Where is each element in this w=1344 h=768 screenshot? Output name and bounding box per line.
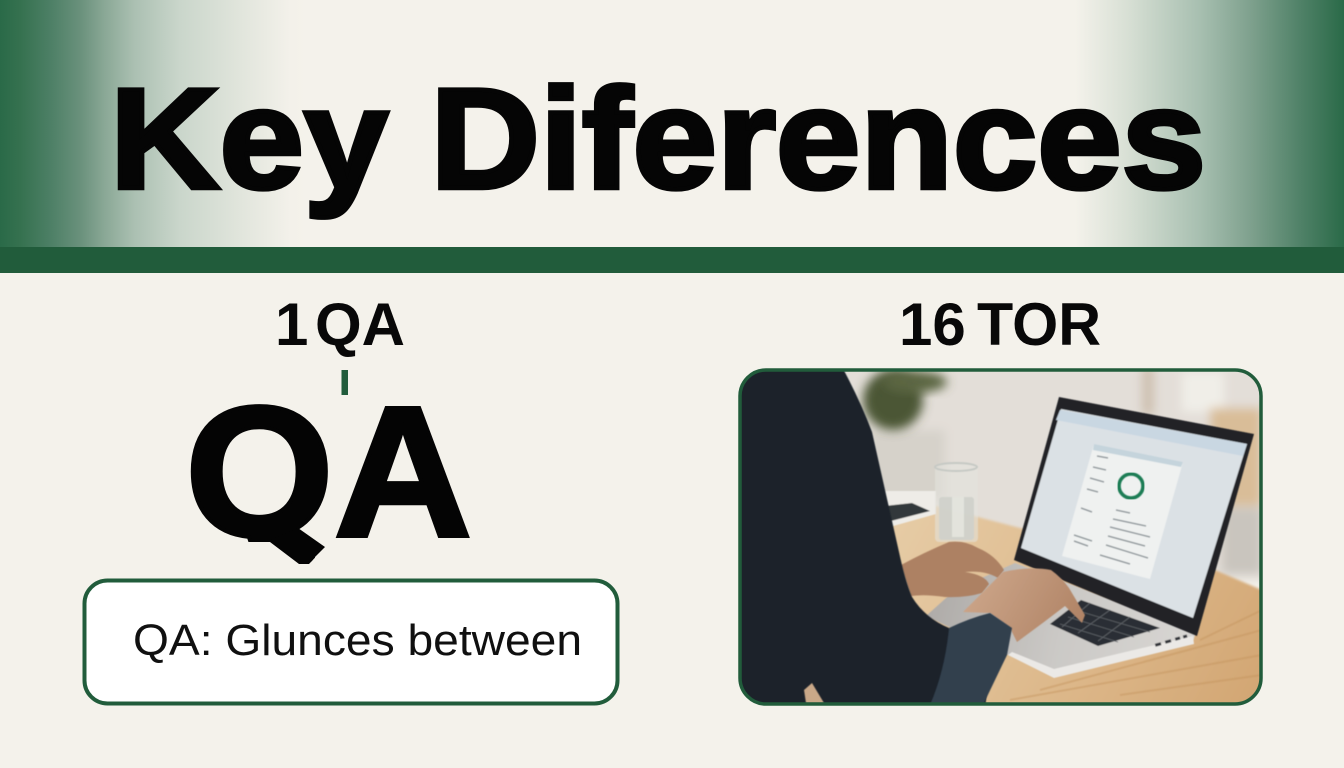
photo: person typing at a laptop: [735, 365, 1270, 710]
laptop base: [926, 563, 1196, 678]
wood grain: [1010, 610, 1262, 700]
green tick mark: [342, 370, 348, 395]
photo frame: [740, 370, 1261, 704]
title: Key Diferences: [110, 60, 1206, 219]
right column heading: TOR: [977, 291, 1101, 358]
tablet on table: [884, 491, 936, 528]
sleeve cuff: [930, 613, 1012, 705]
left hand: [901, 542, 1004, 597]
callout box: [84, 580, 618, 704]
photo background wall: [845, 372, 1260, 582]
screen text lines: [1074, 456, 1150, 564]
left column heading: 1: [275, 291, 308, 358]
right column heading: 16: [899, 291, 966, 358]
right hand: [963, 568, 1085, 642]
callout text: QA: Glunces between: [133, 616, 582, 665]
wooden table: [893, 506, 1260, 702]
donut on screen: [1119, 474, 1143, 498]
person dark body: [735, 365, 990, 710]
laptop screen: [1014, 397, 1254, 636]
blurred plant: [863, 370, 947, 430]
header band: [0, 247, 1344, 273]
left column heading: QA: [315, 291, 405, 358]
large QA label: QA: [185, 369, 472, 576]
header gradient panel: [0, 0, 1344, 247]
wood patch below arm: [804, 683, 824, 703]
glass of water: [935, 463, 978, 542]
